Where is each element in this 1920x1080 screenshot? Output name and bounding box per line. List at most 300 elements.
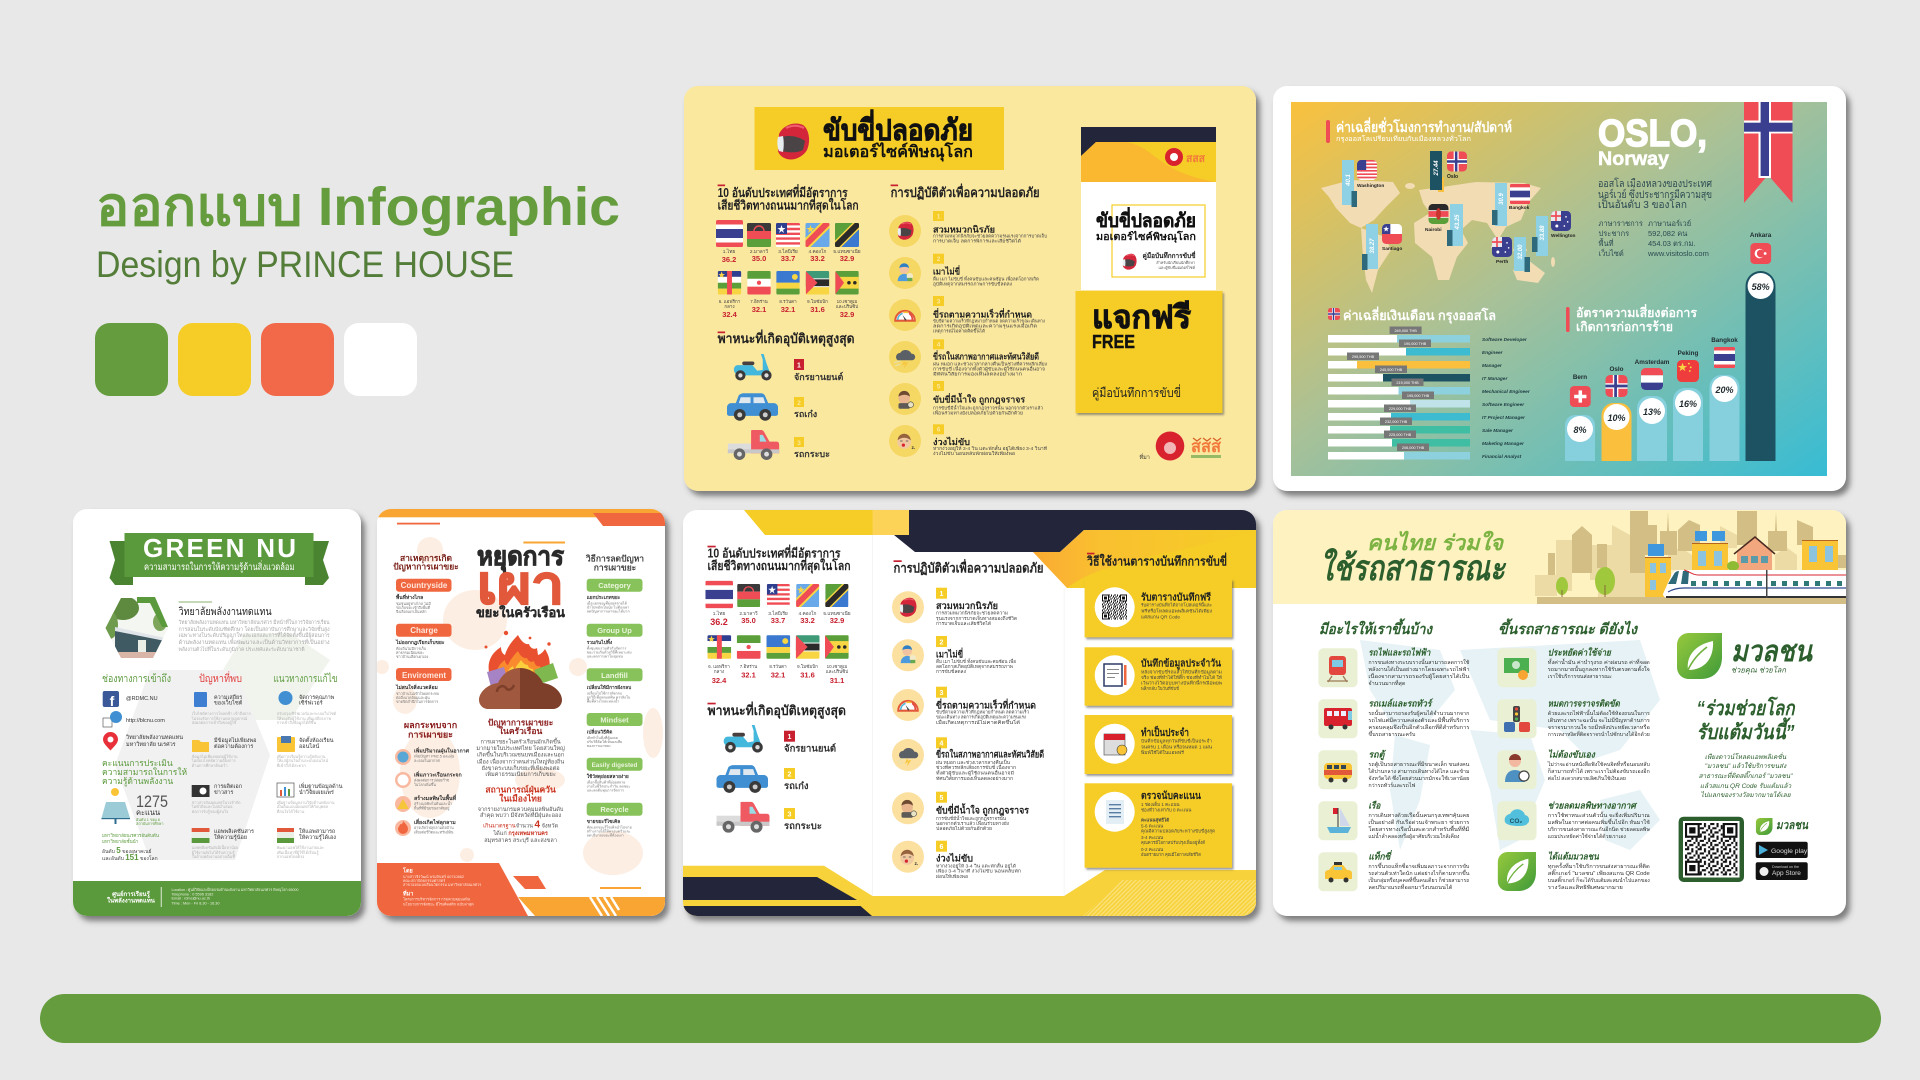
- header illustration: ใช้รถสาธารณะ: [1320, 548, 1507, 588]
- salary bars: [1328, 306, 1531, 460]
- column 2: safety practices: การปฏิบัติตัวเพื่อความปลอดภัย: [894, 559, 1044, 577]
- column: reduce methods: สร้างรายได้ให้ครอบครัวและ: [587, 828, 631, 834]
- column 2: safety practices: 1: [940, 591, 944, 598]
- left column: top 10 countries: 8.รวันดา: [779, 299, 797, 304]
- column: problems found: ของเว็บไซต์: [214, 698, 243, 706]
- column: solutions: ที่เข้าถึงได้สะดวก: [276, 763, 306, 768]
- left column: top 10 countries: 1.ไทย: [723, 248, 735, 255]
- Bangkok tag: [1492, 183, 1530, 226]
- column: impacts: การเผาขยะ: [408, 730, 453, 740]
- step card: check score: 3-4 คะแนน: [1141, 835, 1163, 840]
- column: solutions: เป็นต้นแบบเผยแพร่ให้กับบุคคล: [277, 803, 329, 810]
- step card: get the log: [1085, 579, 1232, 637]
- centre text block: เพิ่มค่าธรรมเนียมการเก็บขยะ: [485, 770, 556, 778]
- column 2: safety practices: ทั้งตัวผู้ขับและผู้ใช้ถนนคนอื่นอาจมี: [936, 770, 1014, 776]
- terrorism risk bar chart: เกิดการก่อการร้าย: [1576, 320, 1673, 334]
- column: access channels: ช่องทางการเข้าถึง: [102, 673, 171, 685]
- footer bar: Telephone : 0 5596 3182: [172, 892, 213, 896]
- terrorism risk bar chart: 13%: [1643, 407, 1661, 417]
- source logos: [1139, 432, 1222, 461]
- left column: transport types: รถเมล์และรถทัวร์: [1368, 698, 1434, 709]
- panel: Oslo Norway infographic: [1273, 86, 1846, 491]
- column 2: safety practices: การบาดเจ็บและเสียชีวิตได้: [936, 619, 991, 626]
- middle column: safety practices: 3: [937, 298, 941, 306]
- left column: transport types: แม่น้ำลำคลองหรือผู้อาศัยบริเวณใกล้เคียง: [1368, 832, 1460, 840]
- step card: check score: คุณมีความปลอดภัยระหว่างขับขี่สูงสุด: [1141, 828, 1215, 835]
- column: reduce methods: เปลี่ยนให้มีการฝังกลบ: [587, 683, 631, 691]
- centre text block: ในครัวเรือน: [499, 726, 542, 736]
- column: impacts: เสี่ยงต่อชีวิตและทรัพย์สิน: [414, 830, 454, 834]
- column: causes: พื้นที่ห่างไกล: [396, 592, 423, 601]
- column: access channels: อันดับ 1 ของ 8: [136, 818, 160, 822]
- column: reduce methods: เลิกทำในสิ่งที่คุ้นเคย: [587, 735, 618, 741]
- column 2: safety practices: ขับขี่มีน้ำใจ ถูกกฎจราจร: [936, 802, 1030, 817]
- column: impacts: เสี่ยงเกิดไฟลุกลาม: [414, 818, 456, 826]
- middle column: benefits: การเหงาหงิดที่ติดจราจรนำไปซักบางได้อีกด้วย: [1548, 730, 1650, 738]
- panel: stop burning waste poster: [375, 509, 665, 916]
- column 1: top 10 countries: 10.เซาตูเม: [827, 664, 847, 670]
- middle column: safety practices: การบาดเจ็บ ลดการพิการและเสียชีวิตได้: [933, 237, 1021, 244]
- callout: free handbook: คู่มือบันทึกการขับขี่: [1092, 384, 1181, 401]
- footer shapes: คณะสถาปัตยกรรมศาสตร์: [403, 878, 445, 883]
- Norway flag ribbon: [1744, 102, 1792, 203]
- Oslo title and facts: 454.03 ตร.กม.: [1648, 239, 1696, 248]
- column 1: vehicles: 2: [788, 772, 792, 778]
- step card: record daily: [1085, 647, 1232, 706]
- column 2: safety practices: ขับขี่ตามความเร็วที่กฎหมายกำหนด ลดความเร็ว: [936, 708, 1029, 715]
- column 2: safety practices: 5: [940, 795, 944, 802]
- college description: เฉพาะทางในระดับปริญญาโทและเอกและการที่ได้จัดตั้งขึ้นมีผู้สอนการ: [179, 631, 330, 639]
- college description: ด้านพลังงานทดแทน เพื่อพัฒนาและเป็นด้านวิทยาการที่เป็นอย่าง: [179, 638, 330, 646]
- ribbon title: ความสามารถในการให้ความรู้ด้านสิ่งแวดล้อม: [144, 560, 294, 573]
- column: solutions: ให้แก่ผู้สนใจผ่านระบบออนไลน์: [277, 758, 328, 764]
- column 2: safety practices: หากง่วงอยู่ให้ 3-4 วิน แตะพักสั้น อยู่ได้: [936, 862, 1016, 870]
- column: reduce methods: ใช้วัสดุย่อยสลายง่าย: [587, 773, 629, 780]
- column 1: top 10 countries: 8.รวันดา: [769, 664, 787, 669]
- middle column: safety practices: 1: [937, 214, 941, 220]
- column 1: top 10 countries: 32.1: [771, 670, 785, 680]
- middle column: benefits: ต่อไป สะดวกสบายเลิศเกินใช้เงินเลย: [1548, 774, 1626, 782]
- column: reduce methods: ปรับวิธีคิดให้เห็นผลเสีย: [587, 738, 622, 744]
- Oslo title and facts: ออสโล เมืองหลวงของประเทศ: [1598, 177, 1712, 190]
- middle column: safety practices: ลดการเกิดอุบัติเหตุและความรุนแรงเมื่อเกิด: [933, 322, 1037, 329]
- left column: top 10 countries: 9.โมซัมบิก: [807, 298, 828, 304]
- header illustration: [1273, 510, 1846, 604]
- column 1: vehicles: รถกระบะ: [784, 821, 822, 832]
- left column: top 10 countries: 32.1: [752, 305, 766, 314]
- terrorism risk bar chart: Peking: [1678, 350, 1698, 357]
- left column: transport types: ขึ้นรถสาธารณะครับ: [1368, 730, 1415, 738]
- column: reduce methods: วิธีการลดปัญหา: [586, 554, 644, 565]
- Santiago tag: Santiago: [1382, 246, 1402, 252]
- column: causes: ค่าธรรมเนียมขยะ: [396, 650, 424, 655]
- middle column: benefits: สติ๊กเกอร์ "มวลชน" เพียงสแกน QR Code: [1548, 869, 1650, 877]
- column: causes: ท้องถิ่นไม่มีการเก็บ: [396, 645, 427, 651]
- column: solutions: เพิ่มการเรียนรู้ความรู้พลังงาน: [277, 754, 326, 760]
- icon: van: [1324, 763, 1352, 782]
- left column: transport types: กว่ารถทัวร์และรถไฟ: [1368, 781, 1416, 789]
- column: reduce methods: เมื่อแยกขยะที่ย่อยสลายได้: [587, 600, 628, 606]
- middle column: benefits: ไม่ต้องขับเอง: [1548, 749, 1596, 760]
- colour palette swatches: [95, 323, 417, 396]
- Oslo title and facts: พื้นที่: [1598, 238, 1614, 248]
- step card: get the log: รับตารางบันทึกได้จากโปสเตอร์นี้และ: [1141, 602, 1212, 608]
- column 2: safety practices: การสวมหมวกนิรภัยจะช่วยลดความ: [936, 610, 1008, 616]
- column 3: how to use the log: [1085, 553, 1232, 868]
- left column: transport types: รถไฟและรถไฟฟ้า: [1368, 647, 1431, 658]
- column: access channels: วิทยาลัยพลังงานทดแทน: [125, 734, 183, 741]
- salary bars: Software Engineer: [1482, 402, 1525, 408]
- step card: check score: คุณควรมีโอกาสปรับปรุงเพิ่มอยู่ทั้งดี: [1141, 839, 1205, 846]
- salary bars: 245,500 THB: [1380, 368, 1403, 372]
- left column: transport types: การขึ้นรถแท็กซี่อาจเพิ่มมลภาวะจากการขับ: [1368, 862, 1469, 870]
- middle column: safety practices: การขับขี่มีน้ำใจและถูกกฎจราจรนั้น นอกจากตัวเราแล้ว: [933, 404, 1043, 411]
- column 1: top 10 countries: 9.โมซัมบิก: [797, 663, 818, 669]
- column: access channels: มหาวิทยาลัยนเรศวรอันดับต้น: [102, 833, 159, 838]
- column: impacts: อาจเกิดไฟลุกลามต่อบ้าน: [414, 825, 454, 831]
- column: access channels: 1275: [136, 792, 168, 811]
- column 1: top 10 countries: 31.6: [800, 670, 815, 680]
- salary bars: 219,000 THB: [1396, 381, 1419, 385]
- middle column: safety practices: อุบัติเหตุจากสมรรถภาพการขับขี่ลดลง: [933, 281, 1012, 288]
- app store badges: มวลชน: [1776, 818, 1809, 832]
- column 2: safety practices: ขี่รถตามความเร็วที่กำหนด: [936, 697, 1036, 711]
- step card: regular habit: จนครบ 1 เดือน หรือจนหมด 1 แผ่น: [1141, 743, 1212, 749]
- college description: วิทยาลัยพลังงานทดแทน: [179, 606, 272, 618]
- Perth tag: [1492, 237, 1530, 272]
- college description: [179, 602, 330, 653]
- centre text block: สำคุด พบว่า มีจังหวัดที่มีฝุ่นละออง: [480, 811, 561, 819]
- middle column: benefits: ได้แต้มมวลชน: [1548, 851, 1600, 862]
- terrorism risk bar chart: Oslo: [1610, 366, 1624, 373]
- booklet cover mockup: คู่มือบันทึกการขับขี่: [1142, 250, 1196, 261]
- left column: transport types: จังหวัดได้ ซึ่งโดยส่วนมากมักจะใช้เวลาน้อย: [1368, 774, 1469, 782]
- terrorism risk bar chart: [1565, 232, 1776, 461]
- column: problems found: มีข้อมูลไม่เพียงพอ: [214, 737, 256, 744]
- column 1: top 10 countries: 2.มาลาวี: [739, 610, 758, 617]
- heading: main title: ออกแบบ Infographic: [96, 177, 620, 237]
- Oslo title and facts: เว็บไซต์: [1598, 248, 1624, 258]
- column 2: safety practices: [892, 559, 1044, 879]
- left column: top 10 countries: 32.1: [781, 305, 795, 314]
- column: access channels: และอันดับ 151 ของโลก: [102, 853, 158, 862]
- top decorative shapes: [744, 510, 1256, 588]
- footer bar: Time : Mon - Fri 8.30 - 16.30: [172, 902, 219, 906]
- middle column: benefits: บริการขนส่งสาธารณะกันอีกนิด ช่วยลดมลพิษ: [1548, 826, 1650, 833]
- icon: traffic jam: [1504, 706, 1530, 732]
- salary bars: 195,000 THB: [1407, 394, 1430, 398]
- booklet cover mockup: ขับขี่ปลอดภัย: [1096, 207, 1196, 232]
- column: solutions: เพิ่มฐานข้อมูลด้าน: [299, 782, 343, 790]
- icon: CO2 cloud: CO₂: [1510, 818, 1522, 825]
- centre text block: การเผาขยะในครัวเรือนมักเกิดขึ้น: [481, 737, 561, 745]
- Oslo title and facts: www.visitoslo.com: [1647, 249, 1709, 258]
- column: problems found: ข่าวสาร: [214, 789, 233, 796]
- footer bar: ศูนย์การเรียนรู้: [112, 890, 151, 899]
- header banner: ขับขี่ปลอดภัย: [823, 109, 973, 147]
- column 1: top 10 countries: 7.อิหร่าน: [740, 664, 757, 669]
- column 2: safety practices: ทัศนวิสัยการมองเห็นลดลงอย่างมาก: [936, 774, 1013, 781]
- column: reduce methods: ลดปัญหาการเผาขยะได้มาก: [587, 608, 630, 614]
- step card: check score: 0-2 คะแนน: [1141, 847, 1163, 852]
- left column: top 10 countries: 33.2: [810, 254, 825, 263]
- column: reduce methods: ง่ายในชีวิตประจำวัน ลดขยะ: [587, 784, 630, 788]
- column 1: top 10 countries: 4.คองโก: [799, 610, 817, 617]
- middle column: safety practices: ฝน หมอก และช่วงเวลากลางคืนเป็นช่วงที่ควรหลีกเลี่ยง: [933, 359, 1047, 366]
- left column: transport types: แท็กซี่: [1368, 850, 1392, 862]
- middle column: benefits: ทั้งค่าน้ำมัน ค่าบำรุงรถ ค่าผ่อนรถ ค่าที่จอด: [1548, 658, 1650, 666]
- middle column: benefits: แถมประหยัดค่าใช้จ่ายได้ด้วยเราเอง: [1548, 832, 1626, 840]
- step card: record daily: บันทึกข้อมูลประจำวัน: [1141, 658, 1221, 671]
- column 2: safety practices: รุนแรงจากการบาดเจ็บทางสมองถึงชีวิต: [936, 614, 1017, 622]
- salary bars: Financial Analyst: [1482, 454, 1522, 460]
- panel: public transport infographic: [1273, 510, 1846, 916]
- column: access channels: ความรู้ด้านพลังงาน: [102, 776, 173, 787]
- column: reduce methods: ขยะร่วมกันด้วยวิธีที่เหมาะสม: [587, 650, 632, 654]
- middle column: benefits: ขึ้นรถสาธารณะ ดียังไง: [1498, 618, 1639, 638]
- column: reduce methods: Recycle: [600, 805, 629, 814]
- column: reduce methods: เลือกซื้อสินค้าที่ย่อยสลาย: [587, 780, 625, 784]
- Nairobi tag: 43.25: [1455, 214, 1461, 231]
- left column: transport types: รถตู้: [1368, 750, 1386, 761]
- left column: transport types: โดยสารทางเรือนั้นสะดวกสำหรับพื้นที่ที่มี: [1368, 825, 1469, 833]
- column 1: top 10 countries: และปรินซิป: [826, 669, 848, 674]
- column: solutions: ให้ความรู้ได้เอง: [299, 834, 336, 841]
- column: access channels: @RDMC.NU: [126, 696, 158, 702]
- column: solutions: จัดการคุณภาพ: [299, 694, 335, 701]
- column: access channels: มหาวิทยาลัยชั้นนำ: [102, 838, 139, 844]
- header illustration: คนไทย ร่วมใจ: [1367, 530, 1505, 555]
- salary bars: Manager: [1482, 363, 1503, 369]
- footer shapes: โครงการบริหารจัดการ กรมควบคุมมลพิษ: [403, 897, 471, 903]
- terrorism risk bar chart: 20%: [1714, 385, 1734, 395]
- column: reduce methods: ลดปริมาณขยะที่ต้องเผา: [587, 832, 624, 838]
- column 1: vehicles: พาหนะที่เกิดอุบัติเหตุสูงสุด: [708, 701, 846, 719]
- column: impacts: พื้นที่ที่มีชุมชนอาศัยอยู่: [414, 806, 449, 812]
- middle column: benefits: เดินทาง เพราะฉะนั้น จะไม่มีปัญหาด้านการ: [1548, 716, 1650, 724]
- column: reduce methods: Group Up: [597, 626, 632, 635]
- column 1: top 10 countries: 35.0: [741, 616, 756, 625]
- middle column: safety practices: เมาไม่ขี่: [933, 265, 960, 277]
- column: causes: ชาวบ้านเลือกเผาเอง: [396, 654, 429, 659]
- left column: vehicles with most accidents: รถกระบะ: [794, 449, 830, 459]
- salary bars: IT Project Manager: [1482, 415, 1526, 421]
- callout: free handbook: [1076, 291, 1222, 413]
- column: solutions: นำวิจัยเผยแพร่: [299, 789, 334, 796]
- ribbon title: [110, 533, 329, 585]
- salary bars: 232,000 THB: [1385, 420, 1408, 424]
- salary bars: Software Developer: [1482, 337, 1528, 343]
- column: reduce methods: เปลี่ยนวิธีคิด: [587, 728, 612, 736]
- footer shapes: โดย: [402, 867, 413, 875]
- middle column: safety practices: ดื่ม เมา ไม่ขับขี่ ทั้งคนขับและคนซ้อน เพื่อลดโอกาสเกิด: [933, 276, 1039, 282]
- panel: Green NU poster: [73, 509, 361, 916]
- quote: เพียงดาวน์โหลดแอพพลิเคชั่น: [1705, 752, 1787, 761]
- panel: safety brochure inner pages: [683, 510, 1256, 916]
- column 2: safety practices: ช่วงที่ควรหลีกเลี่ยงการขับขี่ เนื่องจาก: [936, 764, 1016, 770]
- college description: วิทยาลัยพลังงานทดแทน มหาวิทยาลัยนเรศวร มีหน้าที่ในการวิจัยการเรียน: [179, 618, 330, 626]
- column: problems found: ในด้านพลังงานอย่างเต็มที่: [192, 853, 235, 859]
- title block: [96, 177, 620, 285]
- Santiago tag: 38.27: [1370, 238, 1376, 254]
- column: causes: ปัญหาการเผาขยะ: [393, 561, 459, 572]
- column 1: top 10 countries: 5.แทนซาเนีย: [823, 610, 851, 617]
- left column: vehicles with most accidents: [718, 329, 855, 460]
- column: problems found: ด้านการศึกษาค้นคว้า: [192, 763, 228, 768]
- column: problems found: ให้ความรู้น้อย: [214, 834, 247, 841]
- column: problems found: ไม่รองรับการใช้งานหลายอุปกรณ์: [191, 716, 248, 722]
- column: solutions: การเข้าถึงข้อมูลได้ดีขึ้น: [277, 718, 316, 726]
- column: problems found: ข้อมูลไม่เพียงพอต่อผู้ใช้งาน: [192, 754, 238, 760]
- column 1: vehicles: 3: [788, 812, 792, 818]
- column: impacts: เพิ่มปริมาณฝุ่นในอากาศ: [414, 746, 470, 754]
- column: reduce methods: เปลี่ยนไปใช้การฝังกลบ: [587, 690, 623, 696]
- centre text block: เกิดขึ้นในบริเวณชนบทเมืองและนอก: [477, 751, 564, 759]
- middle column: benefits: รางวัลและสิทธิพิเศษมากมาย: [1548, 884, 1623, 891]
- column 2: safety practices: เมาไม่ขี่: [936, 647, 963, 661]
- hexagon photo: [102, 596, 169, 659]
- column 2: safety practices: ผ่อนให้เพียงพอ: [936, 874, 968, 879]
- icon: train: [1327, 656, 1348, 682]
- left column: transport types: จำนวนมากที่สุด: [1368, 680, 1405, 687]
- column: solutions: แนวทางการแก้ไข: [274, 672, 338, 685]
- Muanchon logo: มวลชน: [1731, 636, 1813, 668]
- centre text block: [476, 718, 565, 844]
- Nairobi tag: Nairobi: [1425, 227, 1442, 233]
- column: causes: ชุมชนอยู่ห่างไกล ไม่มี: [396, 601, 431, 607]
- column: causes: รถเก็บขยะเข้าถึงพื้นที่: [396, 604, 431, 610]
- column: reduce methods: ถูกวิธีเพื่อลดมลพิษ ควรฝังใน: [587, 694, 631, 700]
- column 1: top 10 countries: 33.7: [771, 616, 785, 625]
- left column: transport types: เนื่องจากสามารถรองรับผู้โดยสารได้เป็น: [1368, 672, 1470, 680]
- footer bar: Location : ศูนย์วิจัยและฝึกอบรมด้านพลังงาน มหาวิทยาลัยนเรศวร พิษณุโลก 65000: [172, 887, 298, 893]
- column 2: safety practices: ปลอดภัยไปด้วยกันอีกด้วย: [936, 826, 992, 831]
- left column: top 10 countries: เสียชีวิตทางถนนมากที่สุดในโลก: [718, 196, 859, 214]
- column: problems found: [191, 671, 256, 859]
- column: access channels: f: [110, 693, 115, 709]
- icon: taxi: [1325, 862, 1352, 882]
- middle column: benefits: รถมากมายนั้นถูกลงหากใช้รับตรงตามตั้งใจ: [1548, 665, 1650, 673]
- middle column: safety practices: ขับขี่ตามความเร็วที่กฎหมายกำหนด ลดความเร็วขณะเดินทาง: [933, 316, 1045, 323]
- step card: check score: 5-6 คะแนน: [1141, 823, 1163, 828]
- column: problems found: ความเสถียร: [214, 694, 242, 701]
- step card: check score: 1 ช่องเต็ม 1 คะแนน: [1141, 800, 1180, 807]
- left column: top 10 countries: 32.9: [840, 254, 854, 263]
- bottom green bar: [40, 994, 1881, 1043]
- left column: transport types: เป็นอย่างดี กับเรือด่วนเจ้าพระยา ช่วยการ: [1368, 818, 1470, 826]
- column: reduce methods: [586, 554, 644, 838]
- Oslo title and facts: ภาษาราชการ: [1598, 219, 1643, 228]
- column 1: top 10 countries: 33.2: [800, 616, 815, 625]
- centre text block: เมือง เนื่องจากว่าคนส่วนใหญ่ท้องถิ่น: [477, 757, 564, 765]
- middle column: benefits: จราจรมากวนใจ รถมีหลังประหยัดเวลาหรือ: [1548, 724, 1650, 731]
- column 2: safety practices: สวมหมวกนิรภัย: [936, 601, 998, 612]
- column: causes: ต่อสิ่งแวดล้อมและฝุ่น: [396, 695, 430, 701]
- salary bars: Engineer: [1482, 350, 1504, 356]
- centre text block: สมุทรสาคร สระบุรี และสงขลา: [484, 837, 557, 844]
- column: solutions: พัฒนาแอพให้ใช้งานง่ายและ: [277, 845, 324, 850]
- column: access channels: คะแนนการประเมิน: [102, 758, 173, 768]
- column 3: how to use the log: วิธีใช้งานตารางบันทึกการขับขี่: [1086, 553, 1227, 569]
- column: reduce methods: ขายขยะรีไซเคิล: [587, 818, 620, 825]
- Nairobi tag: [1425, 204, 1463, 246]
- Oslo title and facts: นอร์เวย์ ซึ่งประชากรมีความสุข: [1598, 187, 1712, 201]
- Oslo title and facts: OSLO,: [1598, 113, 1707, 155]
- column: solutions: ปรับปรุงเซิร์ฟเวอร์และระบบเว็บไซต์: [277, 710, 337, 717]
- column: causes: ขาดจิตสำนึกในการจัดการ: [396, 699, 438, 704]
- salary bars: IT Manager: [1482, 376, 1508, 382]
- icon: money: [1504, 658, 1529, 680]
- left column: top 10 countries: และปรินซิป: [836, 304, 858, 309]
- quote: แล้วสแกน QR Code รับแต้มแล้ว: [1700, 782, 1791, 790]
- footer shapes: นางสาวจิรวัฒน์ พรมจันทร์ 60710862: [403, 874, 464, 879]
- world map working hours: กรุงออสโลเปรียบเทียบกับเมืองหลวงทั่วโลก: [1336, 134, 1471, 143]
- app store badges: Download on the: [1772, 865, 1799, 869]
- column: solutions: [274, 672, 343, 859]
- column 1: top 10 countries: 32.1: [741, 670, 756, 680]
- column 2: safety practices: 4: [940, 740, 944, 748]
- terrorism risk bar chart: Ankara: [1750, 232, 1772, 239]
- source logos: ที่มา: [1139, 453, 1150, 461]
- world map working hours: ค่าเฉลี่ยชั่วโมงการทำงาน/สัปดาห์: [1336, 117, 1512, 135]
- column: reduce methods: คัดแยกขยะรีไซเคิลนำไปขาย: [587, 824, 632, 830]
- column: reduce methods: ทั้งชุมชนรวมตัวกันจัดการ: [587, 646, 626, 652]
- column: access channels: อันดับ 5 ของอุษาคเนย์: [102, 846, 152, 855]
- icon: leaf: [1498, 852, 1536, 891]
- column 1: vehicles: รถเก๋ง: [784, 781, 809, 792]
- column: solutions: จากแอพโดยตรง: [277, 854, 304, 859]
- centre text block: ปัญหาการเผาขยะ: [488, 718, 553, 729]
- salary bars: 295,500 THB: [1352, 355, 1375, 359]
- column: solutions: เซิร์ฟเวอร์: [299, 700, 323, 706]
- column 2: safety practices: เพียง 3-4 วินาที ง่วงไม่ขับ นอนหลับพัก: [936, 868, 1021, 874]
- step card: get the log: แค่สแกน QR Code: [1141, 614, 1181, 619]
- column: problems found: ปัญหาที่พบ: [199, 671, 242, 685]
- left column: transport types: เรือ: [1368, 801, 1381, 811]
- left column: top 10 countries: 32.9: [840, 310, 854, 319]
- booklet cover mockup: มอเตอร์ไซค์พิษณุโลก: [1096, 230, 1196, 243]
- step card: regular habit: ทำเป็นประจำ: [1141, 725, 1189, 739]
- salary bars: 225,000 THB: [1389, 433, 1412, 437]
- column: problems found: แอพพลิเคชันสาร: [214, 828, 254, 835]
- left column: transport types: พลังงานได้เป็นอย่างมากโดยเฉพาะรถไฟฟ้า: [1368, 665, 1469, 673]
- footer shapes: นโยบายการจัดขยะ มีไซเคิลสติก ฉบับล่าสุด: [403, 901, 474, 907]
- middle column: safety practices: ง่วงไม่ขับ นอนหลับพักผ่อนให้เพียงพอ: [933, 451, 1015, 456]
- column: problems found: แอพพลิเคชันยังมีเนื้อหาน้อย: [192, 843, 238, 850]
- app store badges: [1756, 818, 1809, 880]
- column: reduce methods: Landfill: [601, 671, 628, 680]
- column: impacts: ในโลกเพิ่มขึ้น: [414, 782, 436, 787]
- world map working hours: [1321, 117, 1575, 293]
- column 1: vehicles: จักรยานยนต์: [784, 743, 836, 755]
- column: reduce methods: นำไปหมักเป็นปุ๋ย ไม่ต้องเผา: [587, 604, 629, 610]
- step card: check score: ตรวจนับคะแนน: [1141, 790, 1202, 802]
- Oslo tag: [1430, 151, 1467, 192]
- column 1: top 10 countries: 31.1: [830, 676, 844, 685]
- column: impacts: สร้างมลพิษในพื้นที่: [414, 793, 457, 802]
- column: reduce methods: Easily digested: [592, 762, 638, 769]
- column 1: top 10 countries: 32.9: [830, 616, 844, 625]
- left column: vehicles with most accidents: 3: [797, 440, 801, 447]
- left column: top 10 countries: 35.0: [752, 254, 766, 263]
- poster title: หยุดการ: [477, 541, 564, 573]
- column 1: top 10 countries: กลาง: [714, 669, 724, 674]
- terrorism risk bar chart: 16%: [1679, 399, 1697, 409]
- middle column: benefits: ประหยัดค่าใช้จ่าย: [1548, 647, 1612, 658]
- centre text block: ยังขาดระบบเก็บขยะที่เพียงพอต่อ: [482, 764, 560, 772]
- left column: top 10 countries: 3.ไลบีเรีย: [778, 248, 798, 255]
- footer shapes: ที่มา: [403, 890, 413, 898]
